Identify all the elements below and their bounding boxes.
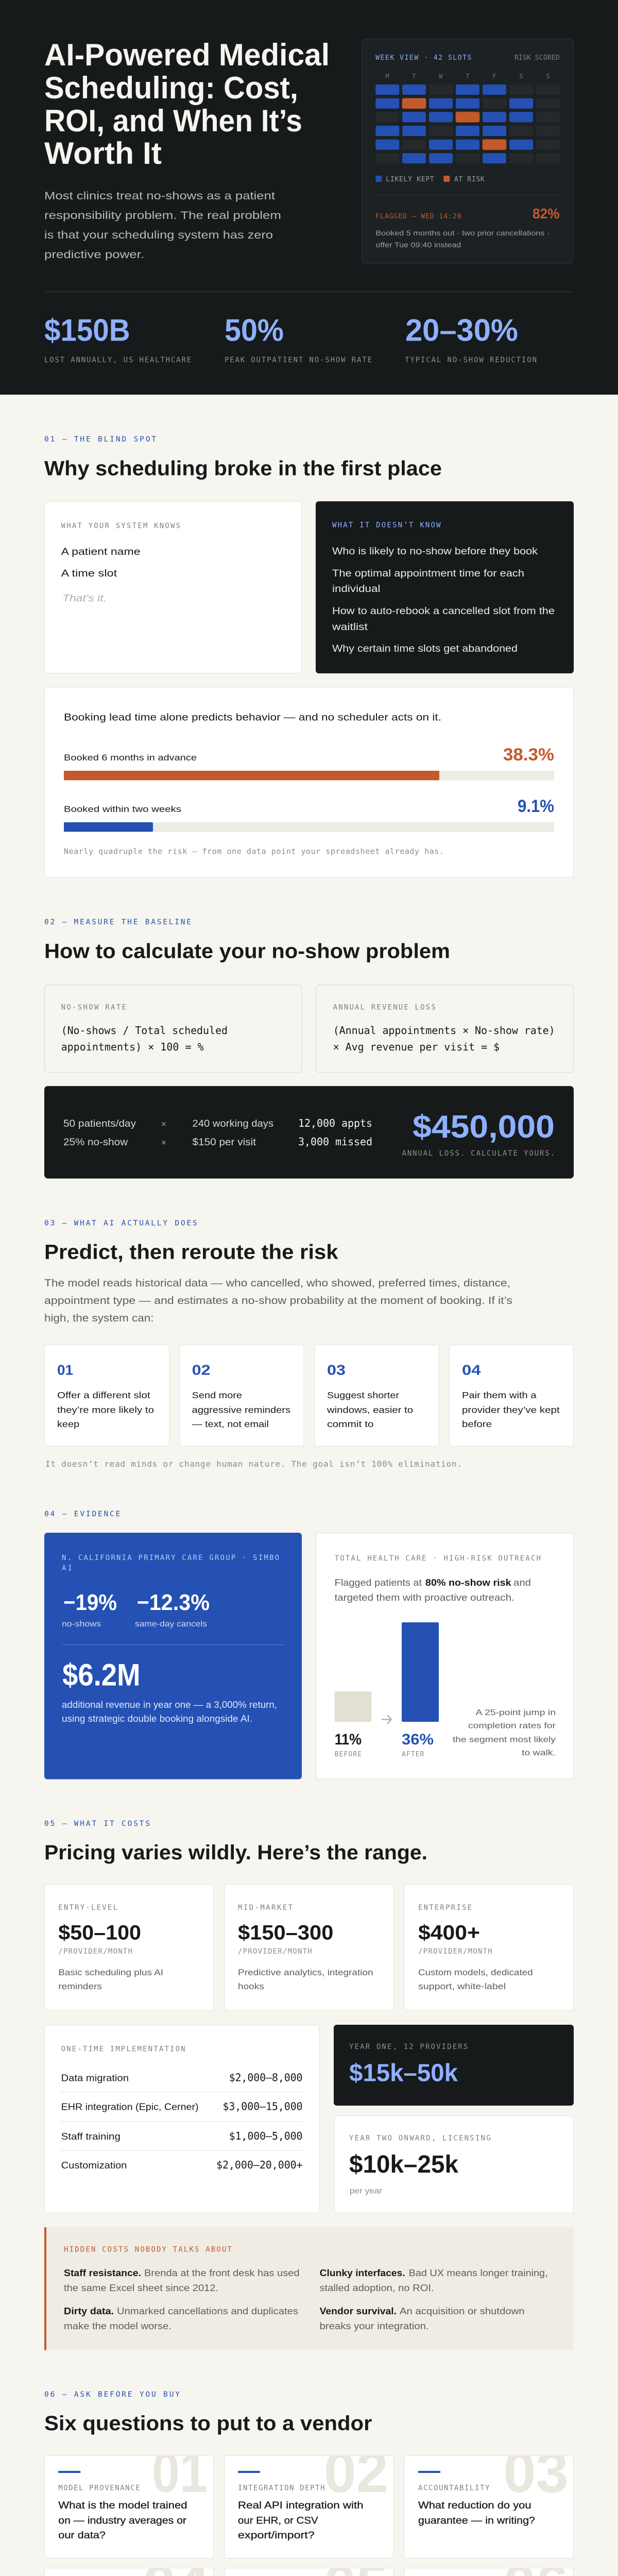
section 05 heading: 05 — WHAT IT COSTS (44, 1820, 150, 1828)
step card 01: they’re more likely to (57, 1404, 154, 1415)
calendar slots grid (375, 84, 560, 163)
pricing card: enterprise: support, white-label (418, 1981, 506, 1991)
calculation row 1: 240 working days (193, 1118, 273, 1129)
known items: A time slot (61, 568, 117, 579)
panel: year one cost: $15k–50k (349, 2060, 458, 2087)
outreach description: and (513, 1577, 531, 1588)
stat: additional revenue: using strategic double booking alongside AI. (62, 1714, 252, 1724)
pricing card: mid-market: hooks (238, 1981, 264, 1991)
question card 03: ACCOUNTABILITY (418, 2484, 490, 2493)
panel: what your system knows (44, 502, 302, 673)
formula text: appointments) × 100 = % (61, 1041, 204, 1053)
panel: year one cost: YEAR ONE, 12 PROVIDERS (349, 2043, 468, 2051)
panel: what your system knows: WHAT YOUR SYSTEM KNOWS (61, 522, 180, 530)
question card 03: guarantee — in writing? (418, 2515, 535, 2527)
before/after bar chart: 11% (335, 1731, 362, 1748)
pricing card: entry-level: $50–100 (58, 1922, 141, 1944)
panel: N. California case study (44, 1533, 302, 1780)
question card 01: on — industry averages or (58, 2515, 187, 2527)
outreach description: Flagged patients at (335, 1577, 422, 1588)
hero title: AI-Powered Medical (44, 38, 330, 72)
hidden cost: clunky interfaces (320, 2268, 548, 2293)
panel: Total Health Care outreach (316, 1533, 574, 1779)
flagged slot readout: FLAGGED — WED 14:20 (375, 213, 461, 221)
hero title: Scheduling: Cost, (44, 71, 298, 105)
weekday labels: T (466, 73, 470, 80)
panel: what your system knows: That’s it. (62, 594, 107, 604)
panel: week view risk calendar (362, 39, 574, 264)
hidden cost: staff resistance: Staff resistance. (64, 2268, 141, 2278)
section 02 heading: 02 — MEASURE THE BASELINE (44, 918, 191, 926)
pricing card: enterprise: /PROVIDER/MONTH (418, 1947, 492, 1956)
stat: additional revenue (62, 1658, 277, 1724)
stat: typical reduction: TYPICAL NO-SHOW REDUCTION (405, 356, 537, 364)
case study label: AI (62, 1564, 72, 1572)
step card 04: Pair them with a (462, 1390, 537, 1400)
section 03 paragraph: high, the system can: (44, 1312, 153, 1324)
weekday labels: S (519, 73, 523, 80)
hidden cost: clunky interfaces: Clunky interfaces. (320, 2268, 405, 2278)
step card 03: windows, easier to (327, 1404, 413, 1415)
hidden cost: vendor survival: An acquisition or shutdown (400, 2306, 525, 2316)
step card 01: keep (57, 1419, 79, 1429)
hidden cost: vendor survival: breaks your integration. (320, 2321, 429, 2331)
panel: year two licensing: YEAR TWO ONWARD, LICENSING (349, 2134, 491, 2142)
step card 02: 02 (192, 1362, 211, 1378)
step card 04: provider they’ve kept (462, 1404, 560, 1415)
stat: peak no-show rate: 50% (225, 313, 284, 347)
hero intro text: is that your scheduling system has zero (44, 229, 273, 241)
pricing card: entry-level: Basic scheduling plus AI (58, 1968, 163, 1977)
icon: arrow (382, 1715, 391, 1724)
section 04 label: 04 — EVIDENCE (44, 1510, 120, 1518)
stat: lost annually (44, 313, 191, 364)
unknown items: The optimal appointment time for each (332, 568, 524, 579)
panel: no-show rate formula: NO-SHOW RATE (61, 1004, 126, 1012)
step card 02 (180, 1345, 304, 1446)
hidden cost: dirty data: Dirty data. (64, 2306, 114, 2316)
step card 01 (44, 1345, 169, 1446)
unknown items: How to auto-rebook a cancelled slot from the (332, 606, 555, 617)
calendar legend: AT RISK (454, 176, 485, 183)
pricing card: enterprise: Custom models, dedicated (418, 1968, 533, 1977)
unknown items (332, 546, 555, 654)
stat: typical reduction: 20–30% (405, 313, 518, 347)
bar: booked within two weeks (64, 796, 554, 832)
pricing card: enterprise: $400+ (418, 1922, 480, 1944)
section 03 paragraph (44, 1277, 512, 1324)
panel: one-time implementation table (44, 2025, 319, 2213)
section 03 heading: Predict, then reroute the risk (44, 1241, 338, 1263)
calculation row 2: 3,000 missed (298, 1136, 372, 1148)
table row: EHR integration: EHR integration (Epic, Cerner) (61, 2102, 199, 2112)
question card 06 (404, 2568, 574, 2576)
pricing card: mid-market: Predictive analytics, integration (238, 1968, 373, 1977)
calendar header: WEEK VIEW · 42 SLOTS (375, 54, 471, 62)
hidden cost: staff resistance: Brenda at the front desk has used (144, 2268, 300, 2278)
stat: peak no-show rate: PEAK OUTPATIENT NO-SHOW RATE (225, 356, 372, 364)
pricing card: entry-level: reminders (58, 1981, 102, 1991)
table row: data migration: $2,000–8,000 (229, 2071, 303, 2083)
stat: lost annually: $150B (44, 313, 130, 347)
outreach description: 80% no-show risk (425, 1577, 511, 1588)
unknown items: Why certain time slots get abandoned (332, 643, 518, 654)
step card 02: — text, not email (192, 1419, 269, 1429)
hero intro text: responsibility problem. The real problem (44, 210, 281, 222)
formula text: (No-shows / Total scheduled (61, 1024, 228, 1037)
question card 01: MODEL PROVENANCE (58, 2484, 140, 2493)
table row: staff training (61, 2130, 303, 2142)
hero intro text: Most clinics treat no-shows as a patient (44, 190, 275, 202)
weekday labels: S (546, 73, 550, 80)
formula text: × Avg revenue per visit = $ (333, 1041, 500, 1053)
hidden cost: dirty data: Unmarked cancellations and duplicates (117, 2306, 298, 2316)
panel: annual revenue loss formula (316, 985, 574, 1073)
stat: additional revenue: additional revenue in year one — a 3,000% return, (62, 1700, 277, 1710)
panel: booking lead time chart (44, 687, 574, 877)
table row: EHR integration: $3,000–15,000 (222, 2100, 303, 2112)
outreach description: targeted them with proactive outreach. (335, 1592, 514, 1603)
question card 03: 03 (503, 2440, 569, 2504)
section 03 heading: 03 — WHAT AI ACTUALLY DOES (44, 1219, 197, 1227)
case study label (62, 1554, 279, 1572)
hidden cost: vendor survival: Vendor survival. (320, 2306, 397, 2316)
table row: EHR integration (61, 2100, 303, 2112)
section 06 heading: Six questions to put to a vendor (44, 2412, 372, 2435)
stat: same-day cancels (135, 1590, 210, 1629)
question card 01: our data? (58, 2530, 106, 2541)
stat: typical reduction (405, 313, 537, 364)
case study label: N. CALIFORNIA PRIMARY CARE GROUP · SIMBO (62, 1554, 279, 1562)
formula text: (Annual appointments × No-show rate) (333, 1024, 555, 1037)
section 01 heading: Why scheduling broke in the first place (44, 457, 442, 480)
calculation row 1 (63, 1117, 372, 1129)
question card 01: 01 (152, 2440, 208, 2504)
before/after bar chart: BEFORE (335, 1751, 362, 1758)
question card 02: our EHR, or CSV (238, 2515, 318, 2527)
question card 05 (224, 2568, 394, 2576)
outreach description (335, 1577, 531, 1603)
panel: annual revenue loss formula: ANNUAL REVENUE LOSS (333, 1004, 436, 1012)
panel: no-show rate formula (44, 985, 302, 1073)
before/after bar chart (335, 1622, 439, 1758)
pricing card: enterprise: ENTERPRISE (418, 1904, 472, 1912)
chart caption: A 25-point jump in (476, 1708, 556, 1717)
stat: additional revenue: $6.2M (62, 1658, 140, 1692)
stat: same-day cancels: −12.3% (137, 1590, 210, 1615)
table row: staff training: Staff training (61, 2131, 121, 2142)
weekday labels: F (492, 73, 496, 80)
pricing card: enterprise (404, 1885, 574, 2010)
panel: year two licensing (334, 2115, 574, 2213)
before/after bar chart: 36% (402, 1731, 434, 1748)
bar: booked 6 months in advance: 38.3% (503, 745, 554, 765)
table row: customization: $2,000–20,000+ (216, 2159, 303, 2171)
hidden cost: staff resistance: the same Excel sheet since 2012. (64, 2283, 218, 2293)
flagged slot readout: offer Tue 09:40 instead (375, 241, 461, 249)
pricing card: entry-level (44, 1885, 214, 2010)
hero title: ROI, and When It’s (44, 104, 302, 138)
calculation row 2: × (161, 1138, 166, 1148)
section 05 heading: Pricing varies wildly. Here’s the range. (44, 1841, 427, 1864)
stat: no-shows: no-shows (62, 1620, 101, 1629)
unknown items: waitlist (332, 622, 368, 633)
section 05 heading (44, 1820, 427, 1864)
calculation row 2 (63, 1136, 372, 1148)
before/after bar chart: AFTER (402, 1751, 424, 1758)
question card 02: export/import? (238, 2530, 315, 2541)
question card 03 (404, 2455, 574, 2558)
hidden cost: vendor survival (320, 2306, 525, 2331)
pricing card: entry-level: /PROVIDER/MONTH (58, 1947, 132, 1956)
chart caption (453, 1708, 556, 1757)
flagged slot readout: Booked 5 months out · two prior cancellations · (375, 229, 550, 237)
table row: customization: Customization (61, 2160, 127, 2171)
question card 03: What reduction do you (418, 2500, 531, 2511)
panel: booking lead time chart: Booking lead time alone predicts behavior — and no scheduler acts on it. (64, 712, 441, 723)
weekday labels: T (412, 73, 416, 80)
step card 02: Send more (192, 1390, 242, 1400)
section 02 heading (44, 918, 450, 962)
panel: year two licensing: per year (350, 2187, 383, 2196)
known items (61, 547, 141, 579)
step card 03 (314, 1345, 439, 1446)
pricing card: mid-market: /PROVIDER/MONTH (238, 1947, 312, 1956)
known items: A patient name (61, 547, 141, 557)
hidden cost: clunky interfaces: stalled adoption, no ROI. (320, 2283, 434, 2293)
calendar header: RISK SCORED (514, 54, 560, 62)
section 06 heading: 06 — ASK BEFORE YOU BUY (44, 2391, 180, 2399)
annual loss figure (402, 1109, 555, 1158)
calculation row 2: $150 per visit (193, 1137, 256, 1148)
stat: same-day cancels: same-day cancels (135, 1620, 207, 1629)
step card 02: aggressive reminders (192, 1404, 290, 1415)
question card 02: Real API integration with (238, 2500, 364, 2511)
weekday labels: W (439, 73, 443, 80)
step card 01: 01 (57, 1362, 73, 1378)
step card 03: Suggest shorter (327, 1390, 399, 1400)
weekday labels (385, 73, 550, 80)
table row: data migration (61, 2071, 303, 2083)
hero intro text (44, 190, 281, 261)
hero title (44, 38, 330, 171)
panel: what it doesn't know: WHAT IT DOESN’T KNOW (332, 521, 441, 530)
stat: no-shows (62, 1590, 117, 1629)
callout: hidden costs: HIDDEN COSTS NOBODY TALKS ABOUT (64, 2245, 232, 2253)
hero intro text: predictive power. (44, 249, 144, 261)
weekday labels: M (385, 73, 389, 80)
hidden cost: dirty data: make the model worse. (64, 2321, 171, 2331)
question card 02: INTEGRATION DEPTH (238, 2484, 325, 2493)
pricing card: mid-market (225, 1885, 393, 2010)
bar: booked 6 months in advance (64, 745, 554, 780)
stat: lost annually: LOST ANNUALLY, US HEALTHCARE (44, 356, 191, 364)
pricing card: mid-market: $150–300 (238, 1922, 333, 1944)
panel: year two licensing: $10k–25k (349, 2151, 458, 2178)
table row: customization (61, 2159, 303, 2171)
calendar legend (375, 176, 485, 183)
panel: Total Health Care outreach: TOTAL HEALTH CARE · HIGH-RISK OUTREACH (335, 1554, 541, 1563)
step card 04: before (462, 1419, 492, 1429)
section 02 heading: How to calculate your no-show problem (44, 940, 450, 962)
section 03 paragraph: The model reads historical data — who cancelled, who showed, preferred times, distance, (44, 1277, 510, 1289)
section 03 paragraph: appointment type — and estimates a no-show probability at the moment of booking. If it’s (44, 1295, 512, 1307)
hero section (0, 0, 618, 395)
step card 03: commit to (327, 1419, 374, 1429)
bar: booked within two weeks: Booked within two weeks (64, 804, 181, 814)
pricing card: mid-market: MID-MARKET (238, 1904, 293, 1912)
calendar header (375, 54, 560, 62)
formula text (333, 1024, 555, 1053)
annual loss figure: $450,000 (413, 1109, 555, 1145)
step card 04: 04 (462, 1362, 481, 1378)
panel: what it doesn't know (316, 501, 574, 673)
hidden cost: staff resistance (64, 2268, 300, 2293)
formula text (61, 1024, 228, 1053)
bar: booked within two weeks: 9.1% (518, 796, 554, 816)
table row: staff training: $1,000–5,000 (229, 2130, 303, 2142)
annual loss figure: ANNUAL LOSS. CALCULATE YOURS. (402, 1149, 555, 1158)
calculation row 1: × (161, 1119, 166, 1129)
calculation row 1: 12,000 appts (298, 1117, 372, 1129)
section 01 heading (44, 435, 442, 480)
callout: hidden costs (44, 2227, 574, 2350)
section 01 heading: 01 — THE BLIND SPOT (44, 435, 156, 444)
step card 03: 03 (327, 1362, 346, 1378)
panel: year one cost (334, 2025, 574, 2106)
panel: booking lead time chart: Nearly quadruple the risk — from one data point your spreadsheet already has. (64, 847, 444, 856)
section 03 heading (44, 1219, 338, 1263)
table row: data migration: Data migration (61, 2073, 129, 2083)
panel: worked example (44, 1086, 574, 1179)
pricing card: entry-level: ENTRY-LEVEL (58, 1904, 117, 1912)
section 06 heading (44, 2391, 372, 2435)
stat: peak no-show rate (225, 313, 372, 364)
question card 01: What is the model trained (58, 2500, 187, 2511)
hidden cost: clunky interfaces: Bad UX means longer training, (409, 2268, 548, 2278)
calendar legend: LIKELY KEPT (386, 176, 434, 183)
chart caption: to walk. (522, 1749, 556, 1757)
stat: no-shows: −19% (63, 1590, 117, 1615)
question card 04 (44, 2568, 214, 2576)
section 03 footnote: It doesn’t read minds or change human nature. The goal isn’t 100% elimination. (45, 1459, 462, 1469)
hidden cost: dirty data (64, 2306, 298, 2331)
panel: one-time implementation table: ONE-TIME IMPLEMENTATION (61, 2045, 185, 2054)
hero title: Worth It (44, 136, 162, 171)
unknown items: Who is likely to no-show before they book (332, 546, 538, 557)
flagged slot readout (375, 206, 560, 249)
bar: booked 6 months in advance: Booked 6 months in advance (64, 753, 197, 762)
chart caption: the segment most likely (453, 1735, 556, 1744)
flagged slot readout: 82% (533, 206, 560, 222)
chart caption: completion rates for (468, 1722, 556, 1730)
question card 01 (44, 2455, 214, 2558)
calculation row 1: 50 patients/day (63, 1118, 136, 1129)
question card 02: 02 (324, 2440, 388, 2504)
step card 01: Offer a different slot (57, 1390, 150, 1400)
question card 02 (224, 2455, 394, 2558)
step card 04 (449, 1345, 574, 1446)
calculation row 2: 25% no-show (63, 1137, 128, 1148)
unknown items: individual (332, 584, 380, 595)
